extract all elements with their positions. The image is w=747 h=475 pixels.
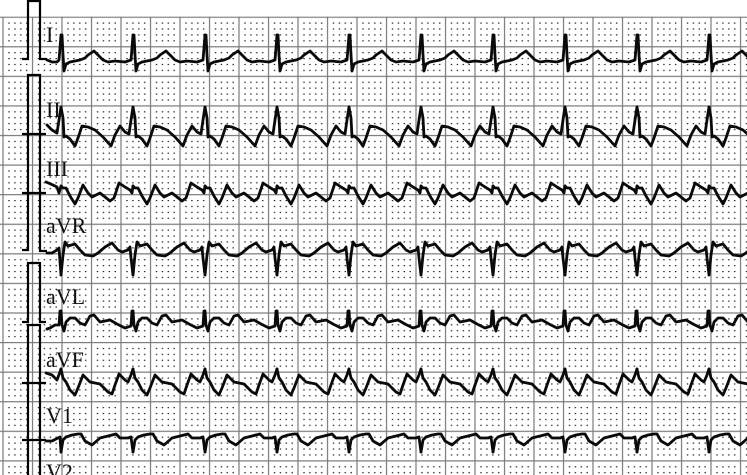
trace: lead aVR bbox=[47, 242, 747, 275]
trace: lead aVL bbox=[47, 311, 747, 331]
lead aVR label: aVR bbox=[46, 213, 87, 238]
trace: lead aVF bbox=[46, 369, 747, 395]
trace: lead I bbox=[47, 35, 747, 71]
calibration pulses bbox=[22, 1, 47, 475]
lead II label: II bbox=[46, 97, 61, 122]
lead aVF label: aVF bbox=[46, 347, 84, 372]
trace: lead V1 bbox=[46, 434, 747, 452]
trace: lead III bbox=[46, 182, 747, 204]
trace: lead II bbox=[47, 107, 747, 146]
lead III label: III bbox=[46, 156, 68, 181]
lead aVL label: aVL bbox=[46, 284, 85, 309]
lead V1 label: V1 bbox=[46, 403, 73, 428]
lead I label: I bbox=[46, 22, 53, 47]
